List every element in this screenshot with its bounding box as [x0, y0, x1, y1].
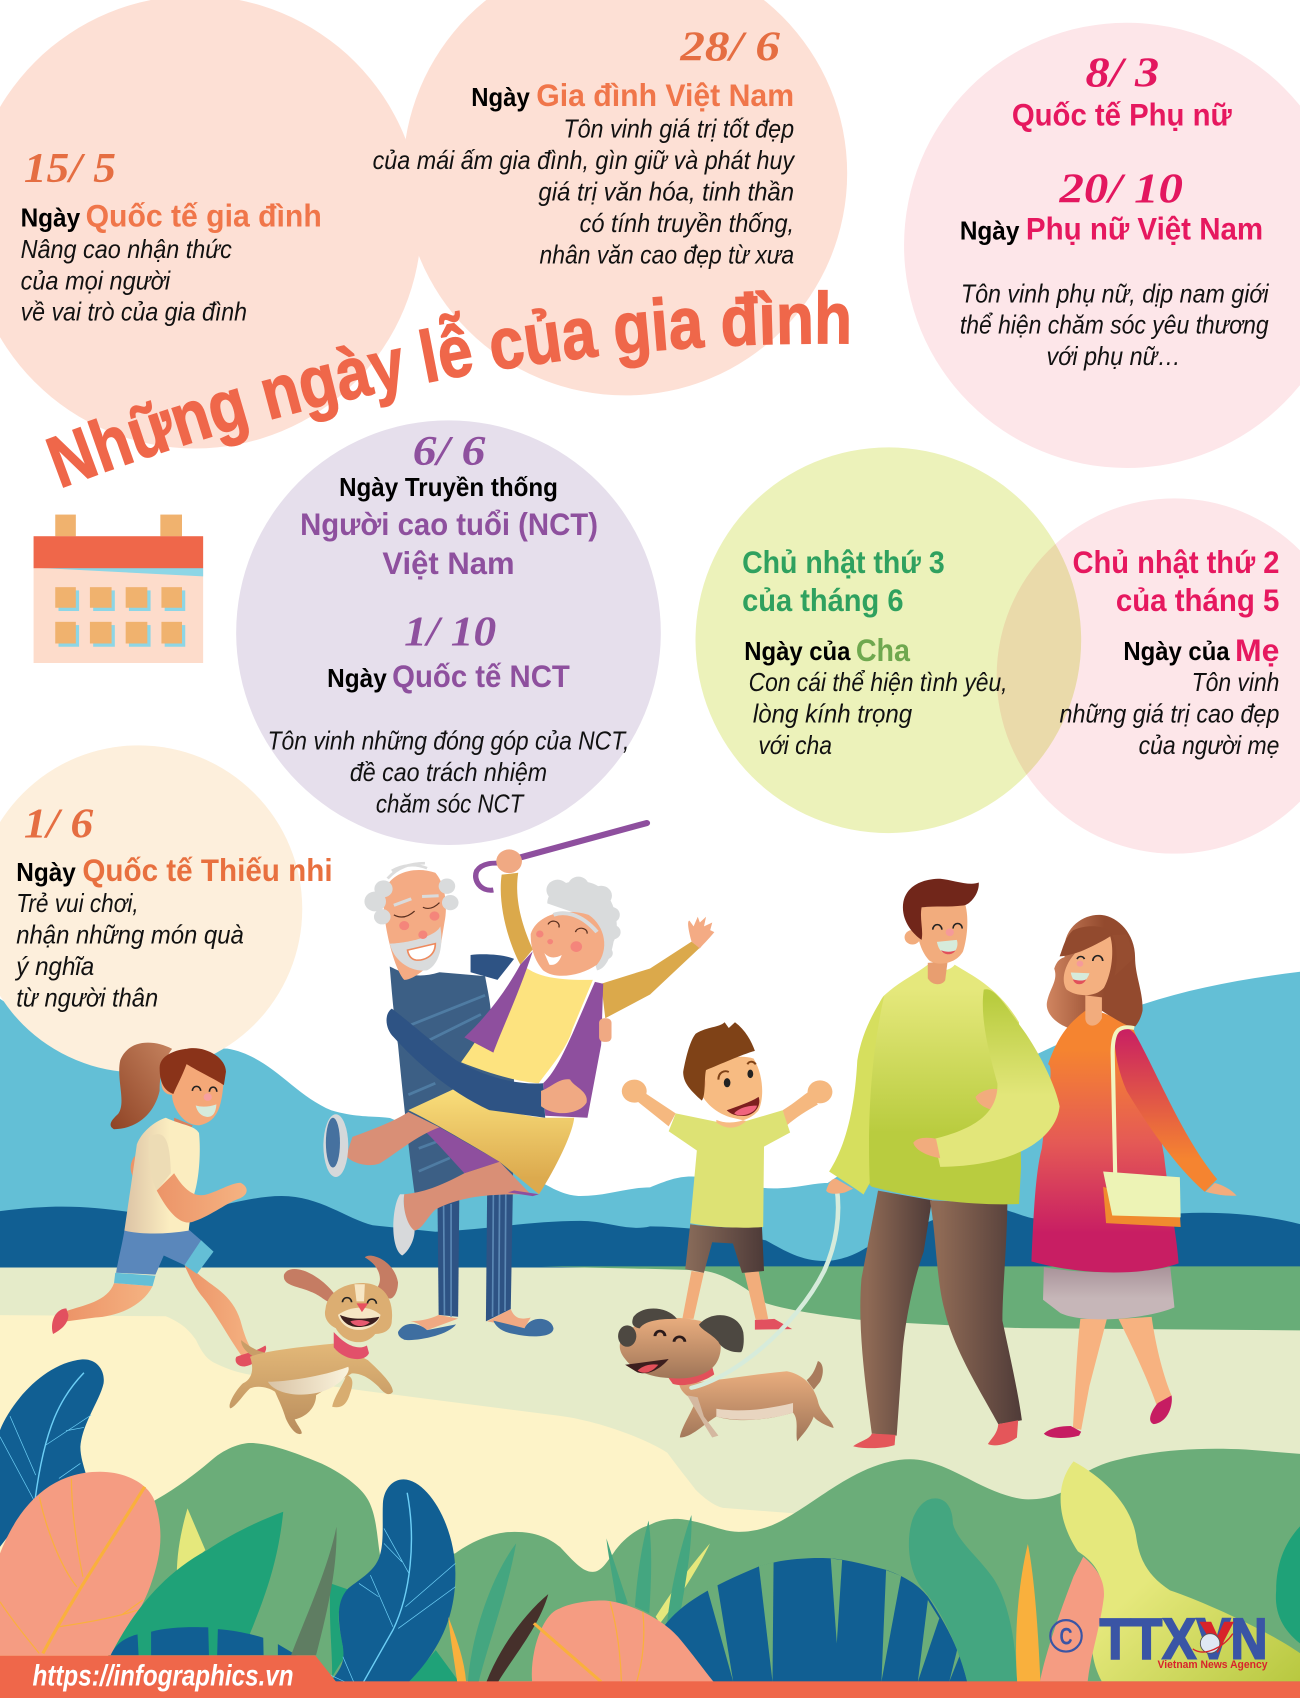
illustration: foliage	[0, 1359, 1300, 1682]
logo: TTXVN: Vietnam News Agency	[1158, 1659, 1268, 1671]
heading: Ngày	[16, 857, 76, 887]
leaf: teal	[111, 1512, 283, 1655]
illustration: grandparents	[323, 823, 714, 1340]
description: Tôn vinh những đóng góp của NCT,	[268, 726, 629, 756]
panel: 28/6 Vietnamese Family Day	[373, 0, 847, 395]
heading: elderly Vietnam	[300, 507, 598, 581]
leaf: blue fan	[664, 1558, 967, 1682]
description: Con cái thể hiện tình yêu,	[749, 667, 1007, 697]
heading: international women's day: Quốc tế Phụ nữ	[1012, 98, 1232, 133]
description	[268, 726, 629, 819]
leaf: salmon right	[1040, 1557, 1104, 1681]
description: của mái ấm gia đình, gìn giữ và phát huy	[373, 145, 796, 175]
date 20/10: 20/ 10	[1058, 166, 1183, 213]
panel: 8/3 and 20/10 women's days	[904, 23, 1300, 468]
heading	[744, 633, 910, 668]
illustration: playful dog	[230, 1256, 398, 1434]
description	[373, 114, 796, 269]
date	[1072, 545, 1279, 618]
description: giá trị văn hóa, tinh thần	[538, 176, 794, 206]
date 1/10: 1/ 10	[404, 609, 496, 656]
leaf: teal right	[909, 1498, 1017, 1682]
heading: Ngày của	[744, 636, 851, 666]
leaf: salmon left	[0, 1472, 160, 1655]
heading: international elderly day: Quốc tế NCT	[392, 659, 570, 694]
description	[749, 667, 1008, 760]
panel: Children's Day	[0, 745, 333, 1073]
icon: calendar	[34, 515, 203, 663]
illustration: mother	[1031, 915, 1237, 1438]
description: với cha	[758, 730, 832, 760]
logo: TTXVN: TTXVN	[1100, 1608, 1267, 1672]
description: lòng kính trọng	[753, 699, 913, 729]
heading: Mẹ	[1235, 633, 1279, 668]
leaf: teal grass	[468, 1543, 516, 1682]
leaf: yellow blade	[656, 1543, 710, 1623]
description: thể hiện chăm sóc yêu thương	[960, 310, 1269, 340]
leaf: blue left	[0, 1359, 104, 1547]
description: đề cao trách nhiệm	[350, 757, 547, 787]
heading: Ngày	[471, 82, 530, 112]
description: nhân văn cao đẹp từ xưa	[540, 239, 794, 269]
date 28/6: 28/ 6	[679, 24, 781, 71]
leaf: blue dome	[111, 1627, 296, 1655]
description: từ người thân	[16, 982, 158, 1012]
heading: traditional day: Ngày Truyền thống	[339, 472, 558, 502]
heading: international elderly day	[327, 659, 570, 694]
date 8/3: 8/ 3	[1086, 50, 1159, 97]
leaf: blue middle	[330, 1479, 455, 1682]
leaf: grey green	[291, 1527, 337, 1655]
footer bar	[0, 1681, 1300, 1698]
leaf: thin orange	[448, 1617, 466, 1682]
date 1/6: 1/ 6	[24, 800, 94, 847]
leaf: dark teal behind	[330, 1583, 350, 1677]
description	[960, 278, 1270, 371]
background: hills and ground	[0, 972, 1300, 1698]
panel: Father's Day	[696, 447, 1081, 833]
illustration: girl running	[52, 1043, 266, 1367]
leaf: teal edge	[1276, 1526, 1300, 1643]
description: của mọi người	[21, 265, 171, 295]
heading: Quốc tế gia đình	[86, 198, 322, 233]
leaf: dark brown	[486, 1594, 548, 1682]
description: Trẻ vui chơi,	[16, 888, 139, 918]
heading	[1123, 633, 1279, 668]
heading: Quốc tế Thiếu nhi	[82, 853, 333, 888]
illustration: boy cheering	[622, 1022, 832, 1330]
date: của tháng 6	[742, 583, 904, 618]
date 15/5: 15/ 5	[24, 145, 116, 192]
leaf: small yellow	[177, 1508, 205, 1575]
date: Chủ nhật thứ 3	[742, 545, 945, 580]
date: Chủ nhật thứ 2	[1072, 545, 1279, 580]
grass blades	[606, 1515, 692, 1640]
description: chăm sóc NCT	[376, 789, 525, 819]
date: của tháng 5	[1116, 583, 1279, 618]
heading: vietnamese women's day: Ngày	[960, 215, 1020, 245]
title: Những ngày lễ của gia đình	[45, 290, 849, 488]
description: của người mẹ	[1139, 730, 1279, 760]
panel: 6/6 and 1/10 elderly days	[236, 420, 661, 845]
leaf: teal base	[409, 1650, 459, 1682]
heading: vietnamese women's day: Phụ nữ Việt Nam	[1026, 211, 1263, 246]
description	[21, 234, 247, 327]
heading: Gia đình Việt Nam	[536, 78, 794, 113]
description: những giá trị cao đẹp	[1060, 699, 1279, 729]
description: với phụ nữ…	[1047, 341, 1181, 371]
description: có tính truyền thống,	[580, 208, 794, 238]
footer url tab	[0, 1655, 336, 1693]
logo: TTXVN: C	[1060, 1624, 1072, 1651]
heading: Ngày	[21, 202, 81, 232]
date 6/6: 6/ 6	[413, 428, 486, 475]
description: nhận những món quà	[16, 920, 244, 950]
url: https://infographics.vn	[32, 1661, 294, 1693]
leaf: orange	[1016, 1544, 1040, 1682]
panel: 15/5 International Family Day	[0, 0, 421, 449]
description	[1060, 667, 1279, 760]
illustration: walking dog with leash	[618, 1187, 838, 1441]
description	[14, 888, 244, 1012]
leaf: salmon centre	[532, 1601, 714, 1682]
description: Tôn vinh phụ nữ, dịp nam giới	[961, 278, 1270, 308]
description: Tôn vinh	[1192, 667, 1279, 697]
date	[742, 545, 945, 618]
centre and right foliage cluster	[532, 1498, 1040, 1682]
heading: international elderly day: Ngày	[327, 663, 387, 693]
description: Tôn vinh giá trị tốt đẹp	[563, 114, 794, 144]
heading: Ngày của	[1123, 636, 1230, 666]
heading: elderly Vietnam: Việt Nam	[382, 546, 515, 581]
heading: elderly Vietnam: Người cao tuổi (NCT)	[300, 507, 598, 542]
description: ý nghĩa	[14, 951, 94, 981]
description: Nâng cao nhận thức	[21, 234, 232, 264]
heading: Cha	[856, 633, 910, 668]
illustration: father	[826, 879, 1060, 1448]
panel: Mother's Day	[997, 498, 1300, 854]
leaf: yellow green	[1061, 1461, 1300, 1681]
left foliage cluster	[0, 1359, 548, 1682]
description: về vai trò của gia đình	[21, 297, 247, 327]
